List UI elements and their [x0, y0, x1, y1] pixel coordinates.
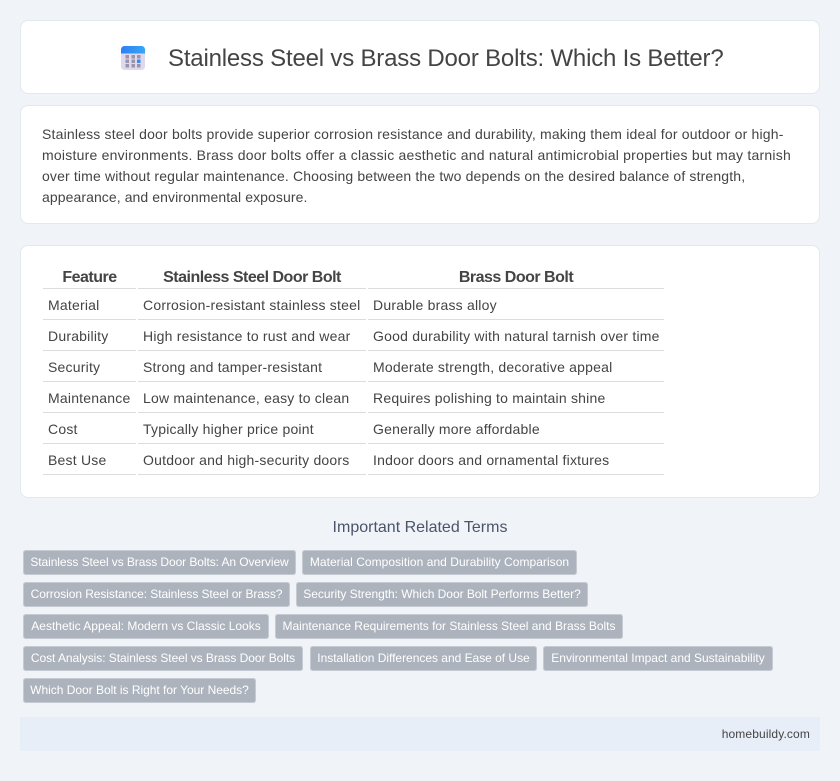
heading: related terms: Important Related Terms	[333, 519, 507, 536]
comparison table: Requires polishing to maintain shine	[373, 390, 605, 406]
related terms tags: Security Strength: Which Door Bolt Performs Better?	[303, 587, 581, 601]
comparison table: Maintenance	[48, 390, 130, 406]
text block: introduction	[42, 126, 791, 205]
comparison table: Generally more affordable	[373, 421, 540, 437]
comparison table: Strong and tamper-resistant	[143, 359, 322, 375]
title: Stainless Steel vs Brass Door Bolts: Which Is Better?	[168, 45, 723, 72]
comparison table: Security	[48, 359, 100, 375]
comparison table: Cost	[48, 421, 78, 437]
text block: introduction: appearance, and environmental exposure.	[42, 189, 307, 205]
comparison table: Indoor doors and ornamental fixtures	[373, 452, 609, 468]
comparison table: Moderate strength, decorative appeal	[373, 359, 612, 375]
related terms tags	[23, 550, 773, 703]
comparison table: Good durability with natural tarnish over time	[373, 328, 660, 344]
text block: introduction: Stainless steel door bolts provide superior corrosion resistance and durability, making them ideal for outdoor or high-	[42, 126, 784, 142]
related terms tags: Cost Analysis: Stainless Steel vs Brass Door Bolts	[31, 651, 295, 665]
comparison table	[43, 269, 664, 475]
panel: title header	[20, 20, 820, 94]
comparison table: Durability	[48, 328, 108, 344]
related terms tags: Stainless Steel vs Brass Door Bolts: An Overview	[30, 555, 289, 569]
panel: introduction	[20, 105, 820, 224]
comparison table: Durable brass alloy	[373, 297, 497, 313]
text block: introduction: over time without regular maintenance. Choosing between the two depends on the desired balance of strength,	[42, 168, 745, 184]
comparison table: Low maintenance, easy to clean	[143, 390, 349, 406]
comparison table: High resistance to rust and wear	[143, 328, 350, 344]
related terms tags: Which Door Bolt is Right for Your Needs?	[30, 683, 249, 697]
related terms tags: Environmental Impact and Sustainability	[551, 651, 765, 665]
text block: introduction: moisture environments. Brass door bolts offer a classic aesthetic and natural antimicrobial properties but may tarnish	[42, 147, 791, 163]
related terms tags: Corrosion Resistance: Stainless Steel or Brass?	[31, 587, 282, 601]
comparison table: Stainless Steel Door Bolt	[163, 269, 341, 286]
comparison table: Feature	[62, 269, 117, 286]
comparison table: Best Use	[48, 452, 106, 468]
related terms tags: Aesthetic Appeal: Modern vs Classic Looks	[31, 619, 261, 633]
icon: calendar grid	[121, 46, 145, 70]
comparison table: Outdoor and high-security doors	[143, 452, 350, 468]
footer source text: homebuildy.com	[722, 727, 810, 741]
related terms tags: Installation Differences and Ease of Use	[317, 651, 530, 665]
footer	[20, 717, 820, 751]
comparison table: Material	[48, 297, 99, 313]
panel: comparison table	[20, 245, 820, 498]
comparison table: Typically higher price point	[143, 421, 314, 437]
related terms tags: Material Composition and Durability Comparison	[310, 555, 569, 569]
related terms tags: Maintenance Requirements for Stainless Steel and Brass Bolts	[282, 619, 615, 633]
comparison table: Brass Door Bolt	[459, 269, 573, 286]
comparison table: Corrosion-resistant stainless steel	[143, 297, 360, 313]
